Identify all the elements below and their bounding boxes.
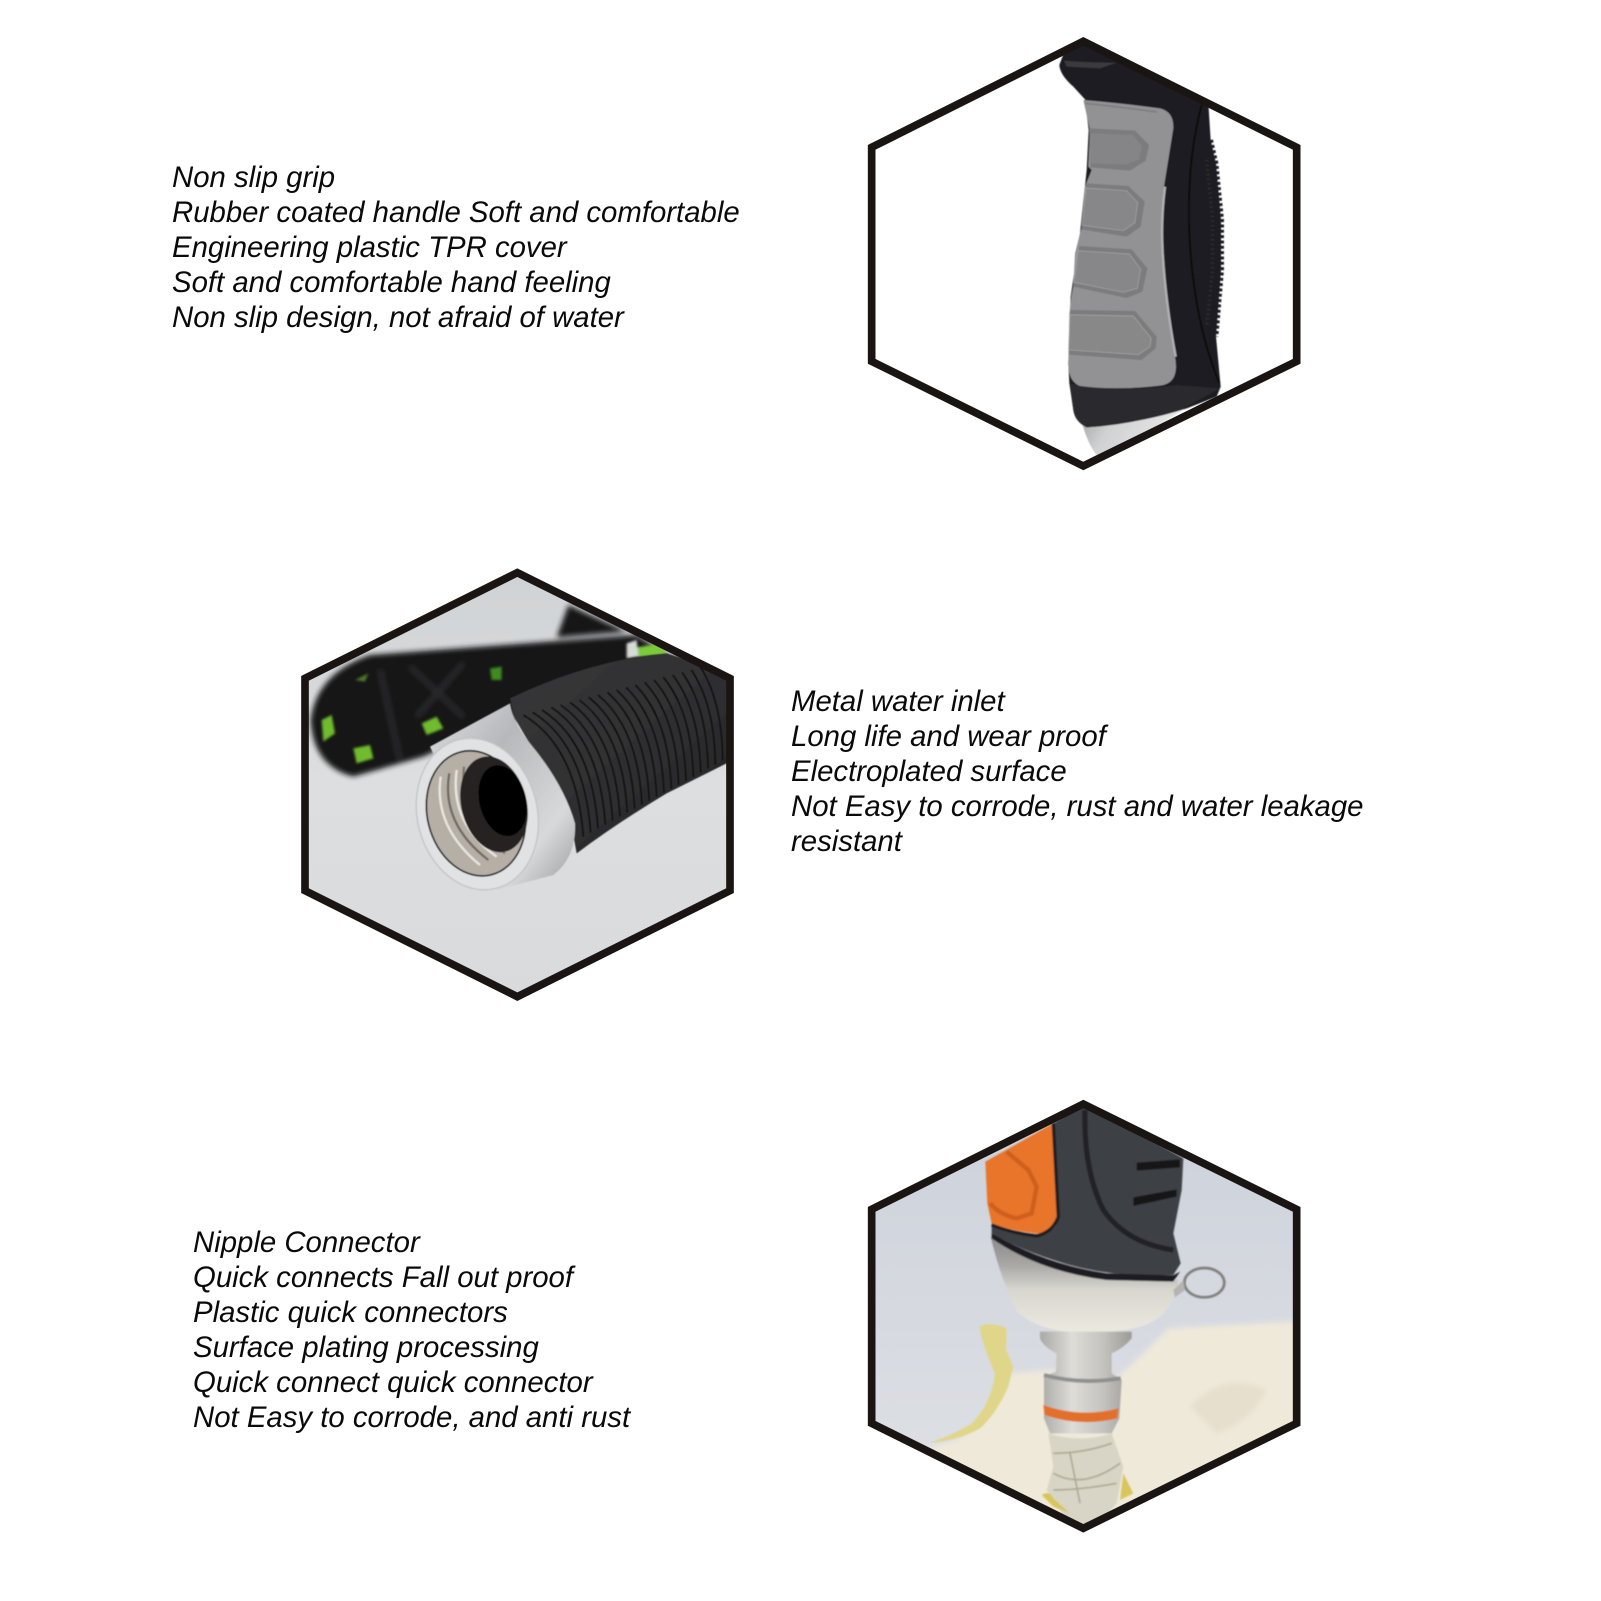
grip pad 3 <box>1073 246 1147 298</box>
ribbed rubber grip <box>510 653 733 853</box>
text block: non slip grip: Rubber coated handle Soft and comfortable <box>172 196 740 229</box>
text block: metal water inlet: resistant <box>791 825 902 858</box>
key ring <box>1173 1268 1224 1297</box>
yellow glue streak <box>930 1324 1013 1443</box>
text block: nipple connector: Surface plating processing <box>193 1331 539 1364</box>
quick connector <box>1040 1332 1132 1433</box>
panel: hexagon photo of nipple connector <box>868 1100 1300 1533</box>
text block: non slip grip: Engineering plastic TPR cover <box>172 231 567 264</box>
grip pad 2 <box>1082 183 1145 237</box>
text block: metal water inlet <box>791 685 1364 858</box>
hexagon frame <box>872 1104 1297 1528</box>
text block: nipple connector <box>193 1226 632 1434</box>
text block: non slip grip: Non slip grip <box>172 161 335 194</box>
text block: non slip grip <box>172 161 740 334</box>
green accents on the trigger <box>322 640 667 763</box>
wrapped hose <box>1047 1433 1123 1530</box>
hexagon frame <box>305 573 730 997</box>
panel: hexagon photo of metal water inlet <box>301 568 734 1001</box>
text block: metal water inlet: Long life and wear proof <box>791 720 1106 753</box>
grip pad 4 <box>1069 310 1157 360</box>
text block: metal water inlet: Not Easy to corrode, rust and water leakage <box>791 790 1364 823</box>
orange trigger button <box>985 1123 1058 1234</box>
text block: nipple connector: Quick connects Fall out proof <box>193 1261 573 1294</box>
hexagon frame <box>872 41 1297 466</box>
text block: metal water inlet: Metal water inlet <box>791 685 1005 718</box>
blurred black trigger behind <box>311 605 673 777</box>
black handle body <box>1059 37 1221 427</box>
text block: non slip grip: Non slip design, not afraid of water <box>172 301 624 334</box>
ridged back strip of the handle <box>1189 105 1222 383</box>
text block: nipple connector: Not Easy to corrode, and anti rust <box>193 1401 630 1434</box>
silver front ring <box>424 738 538 888</box>
orange o-ring <box>1043 1405 1119 1422</box>
text block: nipple connector: Nipple Connector <box>193 1226 420 1259</box>
text block: non slip grip: Soft and comfortable hand feeling <box>172 266 611 299</box>
yellow glue at hose base <box>1042 1473 1133 1513</box>
text block: nipple connector: Plastic quick connectors <box>193 1296 508 1329</box>
dark grey body <box>992 1103 1183 1276</box>
threaded inner bore <box>424 749 526 878</box>
text block: metal water inlet: Electroplated surface <box>791 755 1067 788</box>
grip pad 1 <box>1089 128 1149 171</box>
cream wall patch <box>930 1320 1293 1513</box>
panel: hexagon photo of grip handle <box>868 37 1300 470</box>
slots in the body <box>1137 1159 1180 1171</box>
text block: nipple connector: Quick connect quick connector <box>193 1366 593 1399</box>
grey rubber grip <box>1068 100 1176 388</box>
silver collar <box>430 703 575 890</box>
metal cup <box>991 1237 1178 1333</box>
metal tip at the handle base <box>1082 408 1184 455</box>
